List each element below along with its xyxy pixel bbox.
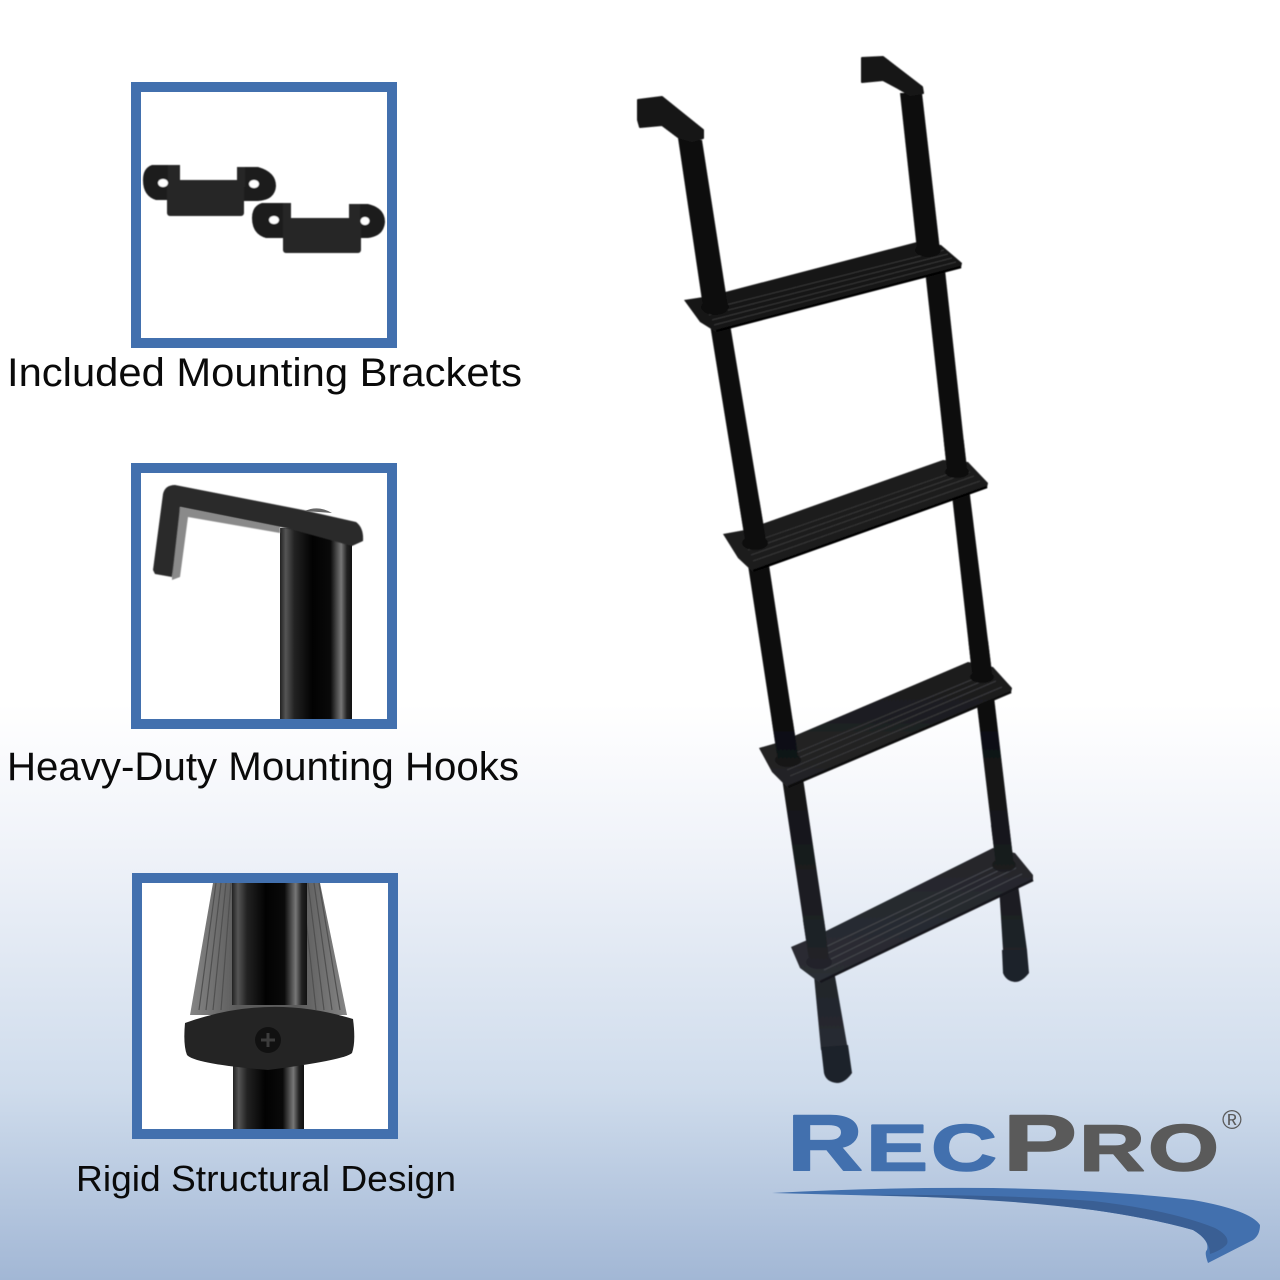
tread 4 (791, 848, 1033, 983)
logo swoosh (772, 1188, 1260, 1263)
end cap (184, 1007, 354, 1070)
panel: included mounting brackets (136, 87, 392, 343)
end cap screw (255, 1027, 281, 1053)
tread 1 (684, 242, 962, 332)
bunk ladder product image (638, 57, 1033, 1083)
tread 3 (759, 662, 1012, 788)
logo wordmark Rec: R (787, 1098, 863, 1188)
heading: heavy-duty mounting hooks: Heavy-Duty Mounting Hooks (7, 745, 519, 789)
logo wordmark Pro: P (1003, 1098, 1077, 1188)
left rubber foot (821, 1045, 852, 1083)
lower tube (233, 1065, 304, 1129)
hook body (153, 485, 363, 577)
right top hook (862, 57, 923, 95)
logo wordmark Rec (787, 1098, 997, 1188)
lower rail segments behind the treads (708, 258, 1027, 1050)
panel frame (136, 87, 392, 343)
left top hook (638, 97, 703, 141)
tube of the hook (280, 528, 352, 719)
icon: mounting bracket left (143, 165, 276, 216)
logo wordmark Pro (1003, 1098, 1219, 1188)
hook lip highlight (172, 507, 280, 580)
upper tube (232, 883, 307, 1005)
right rubber foot (1002, 950, 1029, 982)
panel: rigid structural design (137, 878, 393, 1134)
heading: included mounting brackets: Included Mounting Brackets (7, 351, 522, 395)
left rail upper segments (678, 138, 832, 969)
logo wordmark Pro: O (1148, 1110, 1219, 1184)
right rail upper segments (900, 93, 1016, 872)
screw head (305, 508, 332, 513)
heading: rigid structural design: Rigid Structural Design (76, 1158, 456, 1199)
registered mark: ® (1222, 1105, 1242, 1135)
logo wordmark Rec: C (931, 1110, 997, 1184)
RecPro logo (772, 1098, 1260, 1263)
logo wordmark Rec: E (866, 1110, 928, 1184)
panel frame (136, 468, 392, 724)
logo swoosh shadow (860, 1195, 1228, 1254)
tread 2 (723, 460, 988, 572)
icon: mounting bracket right (252, 203, 385, 253)
logo wordmark Pro: R (1079, 1110, 1145, 1184)
ribbed tread (190, 883, 347, 1015)
panel frame (137, 878, 393, 1134)
panel: heavy-duty mounting hooks (136, 468, 392, 724)
